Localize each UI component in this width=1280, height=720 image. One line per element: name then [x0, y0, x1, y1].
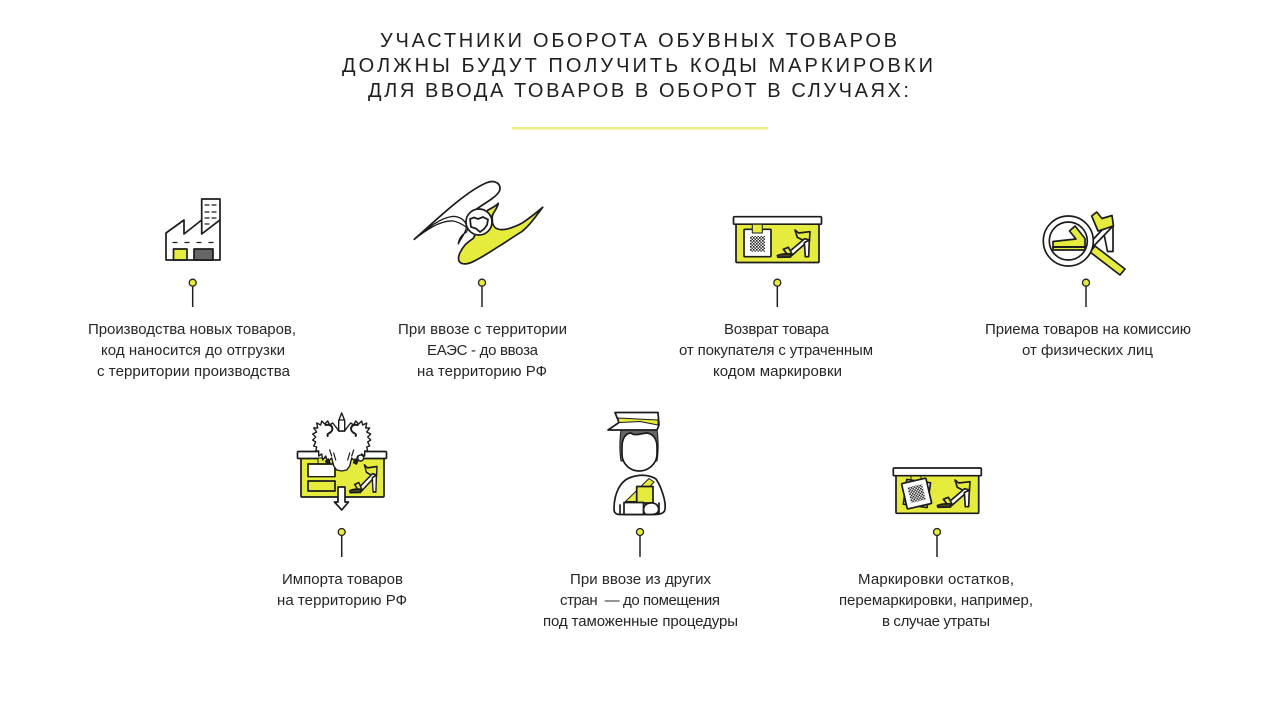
text: от покупателя с утраченным	[679, 342, 873, 359]
pin	[1082, 279, 1090, 307]
icon: double-headed eagle	[313, 413, 371, 471]
text: Приема товаров на комиссию	[985, 321, 1191, 338]
text: ЕАЭС - до ввоза	[427, 342, 539, 359]
text: При ввозе из других	[570, 571, 712, 588]
item: return	[679, 217, 873, 380]
text: перемаркировки, например,	[839, 592, 1033, 609]
text	[839, 571, 1033, 630]
item: other countries	[543, 412, 738, 630]
item: production	[88, 199, 296, 380]
icon: EAEU emblem	[414, 182, 543, 264]
title underline	[512, 127, 768, 130]
pin	[774, 279, 781, 307]
icon: magnifier with shoe	[1043, 212, 1125, 275]
text: Возврат товара	[724, 321, 830, 338]
title: ДЛЯ ВВОДА ТОВАРОВ В ОБОРОТ В СЛУЧАЯХ:	[368, 80, 909, 102]
icon: box with label and shoe	[734, 217, 822, 262]
text: от физических лиц	[1022, 342, 1153, 359]
text: Маркировки остатков,	[858, 571, 1014, 588]
text	[277, 571, 407, 609]
text: стран — до помещения	[560, 592, 720, 609]
text: Производства новых товаров,	[88, 321, 296, 338]
title	[342, 30, 933, 102]
text: Импорта товаров	[282, 571, 403, 588]
pin	[636, 528, 644, 557]
text: При ввозе с территории	[398, 321, 567, 338]
text	[543, 571, 738, 630]
text: с территории производства	[97, 363, 291, 380]
pin	[189, 279, 196, 307]
item: EAEU	[398, 182, 567, 380]
title: УЧАСТНИКИ ОБОРОТА ОБУВНЫХ ТОВАРОВ	[380, 30, 897, 52]
text: под таможенные процедуры	[543, 613, 738, 630]
text	[679, 321, 873, 380]
icon: customs officer	[608, 412, 665, 514]
pin	[338, 528, 345, 557]
text: на территорию РФ	[277, 592, 407, 609]
text: в случае утраты	[882, 613, 990, 630]
title: ДОЛЖНЫ БУДУТ ПОЛУЧИТЬ КОДЫ МАРКИРОВКИ	[342, 55, 933, 77]
icon: factory	[166, 199, 220, 260]
item: commission	[985, 212, 1191, 359]
text	[88, 321, 296, 380]
text	[985, 321, 1191, 359]
text: кодом маркировки	[713, 363, 842, 380]
pin	[934, 528, 940, 557]
pin	[478, 279, 486, 307]
text: на территорию РФ	[417, 363, 547, 380]
text	[398, 321, 567, 380]
item: import	[277, 413, 407, 609]
item: remaining stock	[839, 468, 1033, 630]
text: код наносится до отгрузки	[101, 342, 285, 359]
icon: box with eagle and arrow	[298, 413, 386, 510]
icon: box with tilted label and shoe	[893, 468, 981, 513]
